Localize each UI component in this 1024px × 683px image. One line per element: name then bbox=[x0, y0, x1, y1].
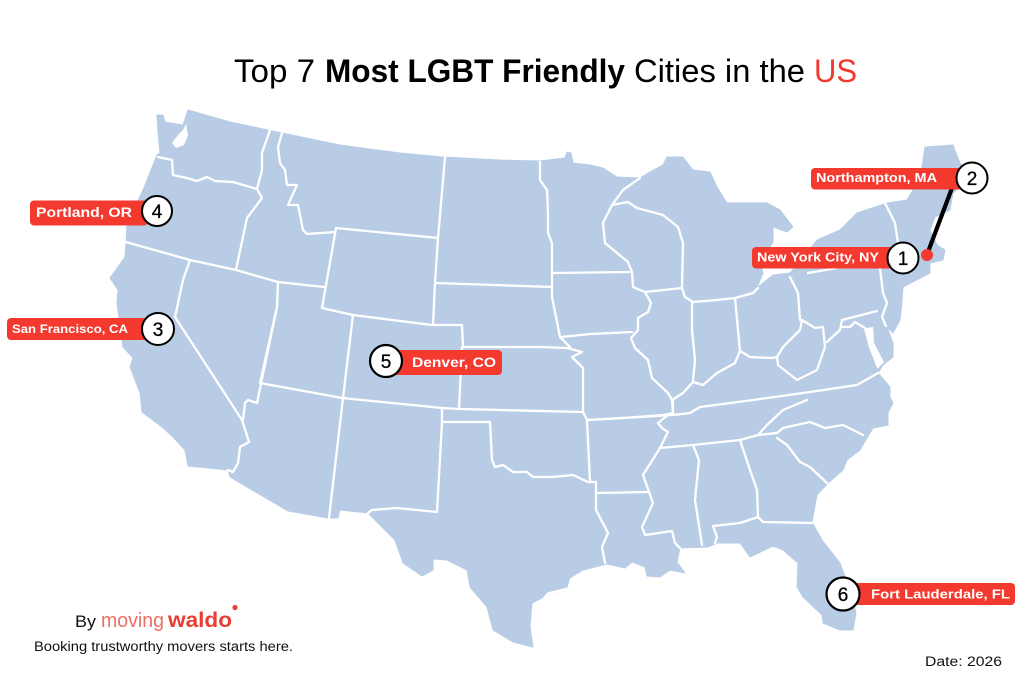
label: San Francisco, CA: San Francisco, CA bbox=[12, 322, 128, 336]
label: New York City, NY bbox=[752, 242, 918, 274]
label: Northampton, MA bbox=[811, 162, 988, 194]
label: Denver, CO: 5 bbox=[381, 352, 391, 373]
logo: By moving waldo: waldo bbox=[167, 609, 232, 632]
state borders bbox=[126, 130, 898, 563]
label: Northampton, MA: 2 bbox=[967, 169, 977, 190]
title bbox=[234, 53, 857, 89]
label: Fort Lauderdale, FL: Fort Lauderdale, FL bbox=[871, 586, 1010, 602]
Chesapeake Bay bbox=[866, 327, 884, 368]
label: Portland, OR: 4 bbox=[152, 202, 163, 223]
label: Northampton, MA: Northampton, MA bbox=[816, 170, 938, 185]
map of the United States bbox=[110, 110, 970, 647]
map outline bbox=[110, 110, 970, 647]
label: Fort Lauderdale, FL: 6 bbox=[838, 585, 848, 606]
logo: By moving waldo: moving bbox=[101, 610, 164, 632]
logo: By moving waldo: By bbox=[75, 612, 97, 631]
label: New York City, NY: New York City, NY bbox=[757, 250, 879, 264]
date: Date: 2026 bbox=[925, 654, 1002, 669]
marker dot bbox=[921, 249, 933, 261]
Puget Sound bbox=[172, 124, 188, 148]
label: Denver, CO bbox=[370, 345, 502, 377]
connector line from Northampton to its map dot bbox=[928, 180, 955, 252]
label: Denver, CO: Denver, CO bbox=[412, 354, 496, 370]
title: Cities in the bbox=[634, 53, 805, 89]
logo: By moving waldo bbox=[75, 605, 238, 632]
title: Top 7 bbox=[234, 53, 315, 89]
label: New York City, NY: 1 bbox=[898, 249, 908, 270]
title: Most LGBT Friendly bbox=[325, 53, 625, 89]
tagline: Booking trustworthy movers starts here. bbox=[34, 639, 293, 654]
title: US bbox=[814, 53, 857, 89]
label: San Francisco, CA bbox=[7, 313, 174, 345]
label: San Francisco, CA: 3 bbox=[153, 320, 163, 341]
label: Portland, OR bbox=[30, 196, 172, 226]
label: Fort Lauderdale, FL bbox=[826, 578, 1015, 610]
label: Portland, OR: Portland, OR bbox=[36, 204, 132, 220]
